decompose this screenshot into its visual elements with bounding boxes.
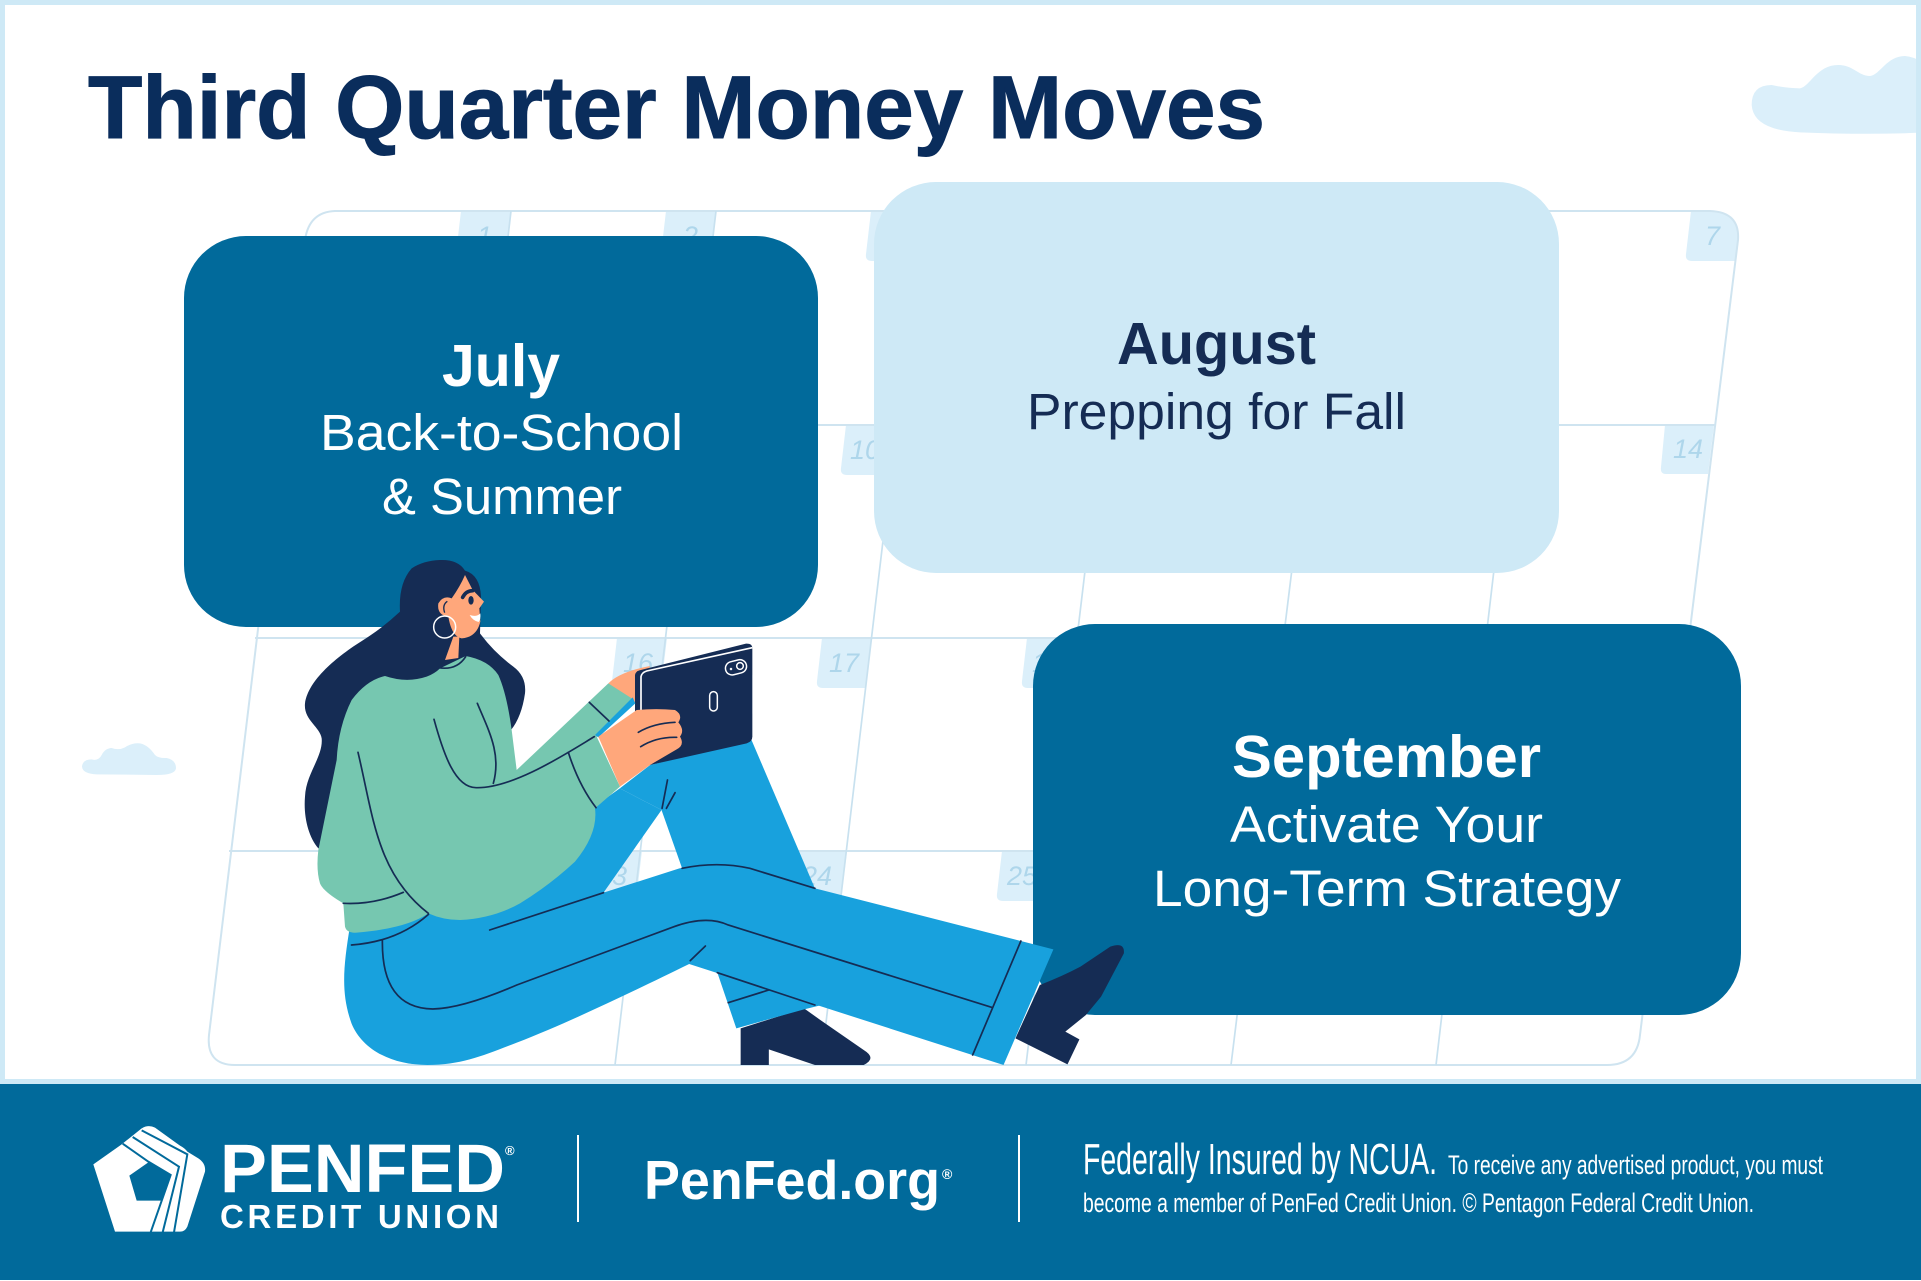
calendar background [209,211,1738,1065]
panel: July [184,236,818,627]
calendar date numbers: 10 [850,435,880,465]
near boot [1015,945,1124,1064]
title: Third Quarter Money Moves [88,57,1265,157]
calendar grid [209,211,1738,1065]
logo: credit union: CREDIT UNION [220,1198,499,1235]
calendar date numbers: 24 [801,861,832,891]
sweater [317,656,633,933]
calendar date numbers: 23 [596,861,627,891]
sweater, head and tablet [317,575,752,933]
earring [434,616,456,638]
panel: September [1033,624,1741,1015]
calendar date numbers: 2 [682,221,698,251]
logo: PenFed pentagon [93,1126,205,1232]
calendar date numbers: 14 [1673,434,1703,464]
sweater folds [477,703,496,783]
logo: registered mark: ® [505,1143,515,1158]
July text: & Summer [382,468,622,525]
September heading: September [1232,724,1541,790]
calendar date numbers: 25 [1006,861,1038,891]
September text: Activate Your [1230,796,1543,853]
illustration: woman with tablet [305,560,1124,1065]
calendar date numbers: 18 [1032,648,1062,678]
calendar date numbers [477,221,1721,891]
footer band [0,1084,1921,1280]
website registered mark: ® [942,1166,953,1182]
near hand [598,709,682,787]
tablet camera [710,658,748,711]
jeans [344,740,1053,1065]
calendar date numbers: 17 [829,648,860,678]
website: PenFed.org [644,1149,940,1211]
jeans cuff strip [595,697,635,737]
panel: August [874,182,1559,573]
face [438,575,484,638]
far hand [608,666,650,703]
July text: Back-to-School [320,404,683,461]
calendar date tabs [456,211,1738,901]
divider [577,1135,579,1222]
divider [1018,1135,1020,1222]
insurance disclosure: Federally Insured by NCUA. [1083,1135,1437,1184]
cloud left [82,743,176,775]
tablet [635,644,752,765]
calendar date numbers: 7 [1705,221,1721,251]
August text: Prepping for Fall [1027,383,1406,440]
calendar date numbers: 16 [623,648,654,678]
hair [305,560,525,848]
July heading: July [442,333,560,399]
far boot [741,1008,870,1065]
August heading: August [1117,311,1316,377]
cloud top right [1752,56,1921,134]
September text: Long-Term Strategy [1153,860,1622,917]
logo: PENFED wordmark: PENFED [220,1130,505,1207]
calendar date numbers: 3 [890,221,905,251]
neck [445,637,459,660]
calendar date numbers: 1 [477,221,492,251]
